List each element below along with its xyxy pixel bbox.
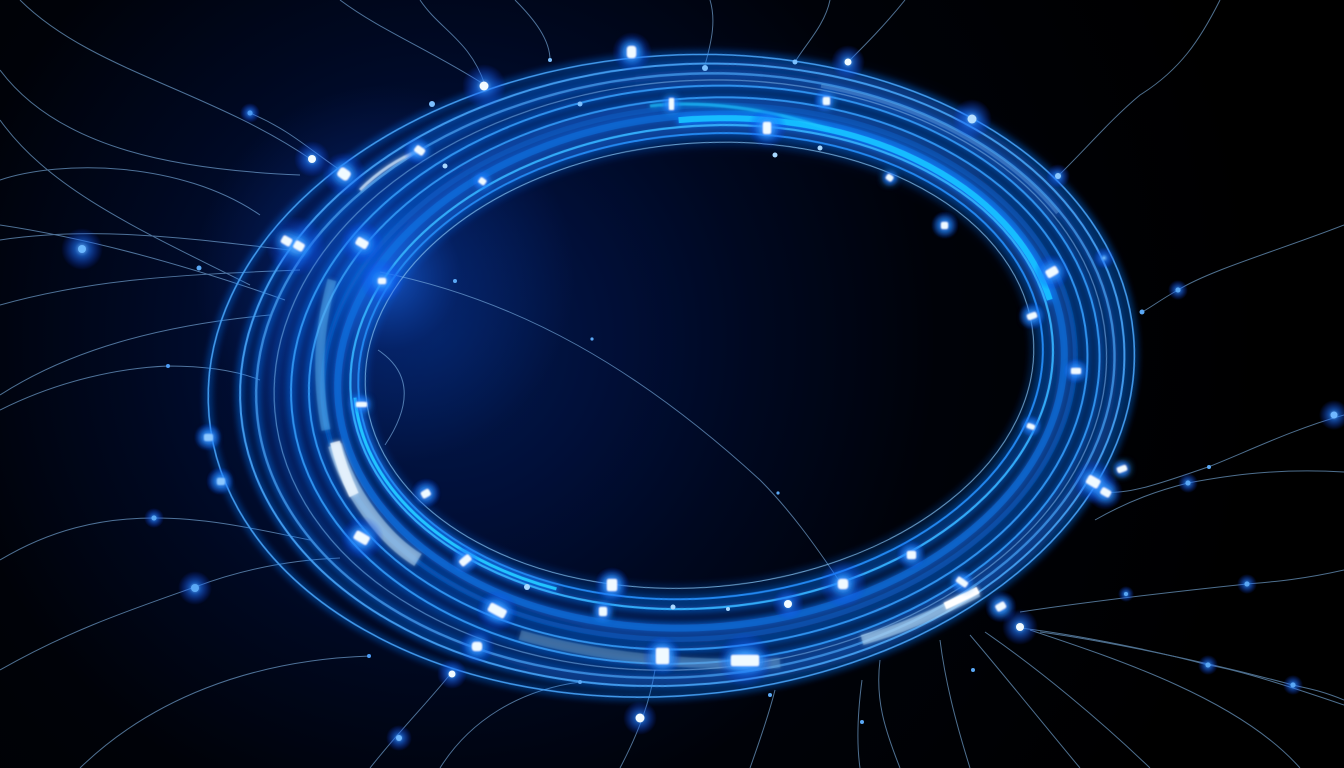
cyan arc, lower left <box>334 102 1067 633</box>
grey fibre streak, upper right <box>240 41 1137 707</box>
highlighted fibre arcs <box>320 104 978 664</box>
ring of concentric fibres <box>181 17 1161 735</box>
bright cyan arc, upper right <box>322 89 1079 649</box>
ring outer glow <box>273 66 1107 677</box>
bright rectangular light segments <box>204 46 1128 666</box>
